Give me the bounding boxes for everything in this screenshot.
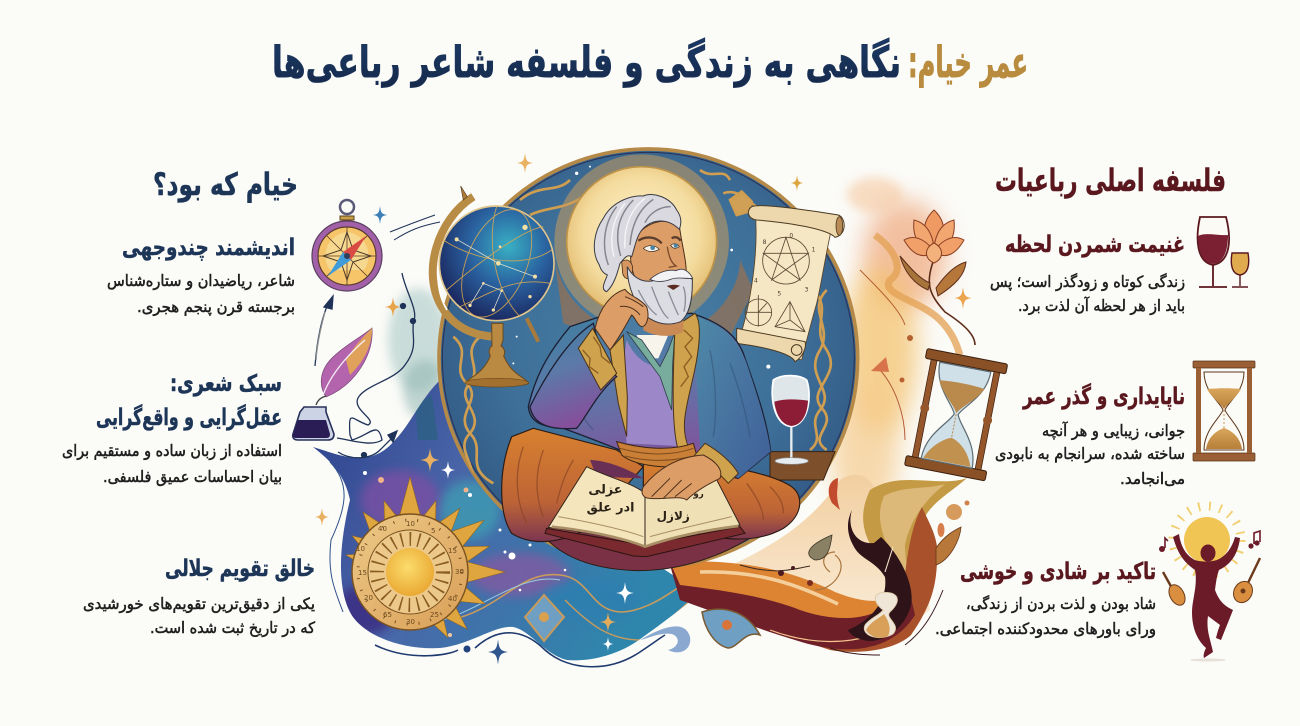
legs bbox=[502, 428, 643, 542]
item: transience of life: جوانی، زیبایی و هر آنچه bbox=[1042, 421, 1185, 441]
icon: sun dial calendar bbox=[343, 477, 505, 643]
scroll: 8 bbox=[763, 239, 767, 246]
medallion disc bbox=[439, 149, 858, 568]
icon: lotus flower bbox=[900, 210, 975, 345]
book calligraphy bbox=[587, 481, 704, 523]
raised sleeve bbox=[530, 323, 617, 429]
icon: sun dial calendar: 25 bbox=[430, 611, 439, 619]
book calligraphy: ادر علق bbox=[587, 500, 634, 515]
panel: who was Khayyam bbox=[62, 167, 316, 638]
icon: compass bbox=[312, 200, 382, 291]
scroll bbox=[737, 206, 844, 362]
icon: sun dial calendar: 15 bbox=[448, 547, 457, 555]
item: poetic style: استفاده از زبان ساده و مستقیم برای bbox=[62, 442, 282, 461]
blue curl bbox=[640, 626, 690, 652]
illustration: watercolor backdrop bbox=[313, 177, 970, 667]
icon: sun dial calendar: 10 bbox=[356, 545, 365, 553]
icon: sun dial calendar: 40 bbox=[448, 595, 457, 603]
item: poetic style: عقل‌گرایی و واقع‌گرایی bbox=[96, 404, 282, 431]
scroll: 4 bbox=[754, 278, 758, 285]
item: emphasis on joy: تاکید بر شادی و خوشی bbox=[960, 559, 1156, 585]
icon: dancing figure with sun and guitars bbox=[1159, 506, 1260, 662]
icon: sun dial calendar: 5 bbox=[431, 527, 435, 535]
item: transience of life: ساخته شده، سرانجام به نابودی bbox=[995, 445, 1185, 463]
item: polymath bbox=[107, 235, 295, 317]
item: seize the moment: غنیمت شمردن لحظه bbox=[1005, 232, 1185, 258]
icon: sun dial calendar: 40 bbox=[378, 525, 387, 533]
table and wine glass bbox=[770, 376, 835, 480]
item: Jalali calendar: خالق تقویم جلالی bbox=[165, 556, 315, 582]
heading: who was Khayyam: خیام که بود؟ bbox=[153, 167, 298, 203]
sparkles around the medallion bbox=[315, 153, 972, 664]
item: poetic style: بیان احساسات عمیق فلسفی. bbox=[103, 468, 282, 486]
item: transience of life: ناپایداری و گذر عمر bbox=[1022, 383, 1185, 410]
paisley ornament bbox=[702, 609, 760, 648]
icon: sun dial calendar: 30 bbox=[406, 618, 415, 626]
item: seize the moment: باید از هر لحظه آن لذت برد. bbox=[1018, 296, 1185, 315]
icon: wine glasses bbox=[1198, 217, 1249, 287]
icon: sun dial calendar: 20 bbox=[364, 594, 373, 602]
globe bbox=[433, 186, 554, 387]
item: seize the moment: زندگی کوتاه و زودگذر است؛ پس bbox=[990, 273, 1185, 292]
item: poetic style: سبک شعری: bbox=[170, 371, 282, 397]
item: polymath: شاعر، ریاضیدان و ستاره‌شناس bbox=[107, 272, 295, 291]
book calligraphy: زلازل bbox=[657, 509, 690, 523]
wave outline under swoosh bbox=[375, 633, 665, 667]
icon: sun dial calendar: 15 bbox=[358, 569, 367, 577]
icon: sun dial calendar: 30 bbox=[455, 568, 464, 576]
icon: sun dial calendar: 10 bbox=[406, 520, 415, 528]
scroll: 3 bbox=[805, 286, 809, 293]
eyes and brow bbox=[638, 237, 681, 243]
book calligraphy: عزلی bbox=[588, 481, 622, 496]
undershirt and tunic bbox=[620, 340, 690, 447]
item: seize the moment bbox=[990, 232, 1185, 315]
ear bbox=[622, 260, 633, 279]
flowing orange ribbons bbox=[875, 235, 960, 355]
lower robe under the book bbox=[537, 517, 773, 571]
book calligraphy: رو bbox=[692, 490, 704, 500]
item: polymath: اندیشمند چندوجهی bbox=[122, 235, 295, 261]
title: نگاهی به زندگی و فلسفه شاعر رباعی‌ها bbox=[272, 37, 901, 88]
item: polymath: برجسته قرن پنجم هجری. bbox=[137, 298, 295, 317]
scroll: 5 bbox=[777, 290, 781, 297]
item: Jalali calendar: یکی از دقیق‌ترین تقویم‌های خورشیدی bbox=[83, 595, 315, 613]
title: عمر خیام: bbox=[908, 38, 1028, 88]
icon: tilted hourglass bbox=[904, 348, 1008, 481]
figure of Omar Khayyam bbox=[502, 194, 800, 571]
item: transience of life: می‌انجامد. bbox=[1120, 470, 1185, 488]
robe torso bbox=[528, 313, 771, 478]
panel: core philosophy of the Rubaiyat bbox=[935, 163, 1226, 639]
wavy hair bbox=[594, 194, 681, 292]
icon: sun dial calendar: 65 bbox=[383, 611, 392, 619]
right sleeve cuff bbox=[693, 443, 738, 483]
icon: quill and inkwell bbox=[293, 328, 372, 440]
item: poetic style bbox=[62, 371, 282, 486]
item: Jalali calendar bbox=[83, 556, 316, 638]
sash bbox=[617, 442, 697, 467]
item: emphasis on joy bbox=[935, 559, 1156, 639]
arabesque ornaments bbox=[453, 170, 831, 483]
hand at chin bbox=[595, 289, 648, 350]
illustration: central medallion of Khayyam bbox=[433, 149, 858, 571]
gold trim bbox=[673, 313, 699, 450]
arrow: up right orange bbox=[878, 368, 905, 440]
item: emphasis on joy: شاد بودن و لذت بردن از زندگی، bbox=[966, 595, 1156, 614]
item: Jalali calendar: که در تاریخ ثبت شده است. bbox=[150, 619, 316, 638]
left-bottom nebula swoosh bbox=[313, 380, 700, 660]
item: transience of life bbox=[995, 383, 1185, 488]
item: emphasis on joy: ورای باورهای محدودکننده اجتماعی. bbox=[935, 620, 1156, 639]
icon: framed hourglass bbox=[1193, 361, 1255, 461]
icon: star trail and arrows left bbox=[315, 215, 440, 458]
open book bbox=[545, 455, 745, 557]
face bbox=[631, 221, 686, 291]
right flame swoosh bbox=[670, 475, 970, 655]
scroll: 0 bbox=[789, 232, 793, 239]
resting hand bbox=[642, 455, 721, 500]
neck bbox=[643, 317, 683, 336]
halo bbox=[554, 154, 729, 329]
beard bbox=[627, 267, 692, 324]
scroll: 1 bbox=[812, 247, 816, 254]
